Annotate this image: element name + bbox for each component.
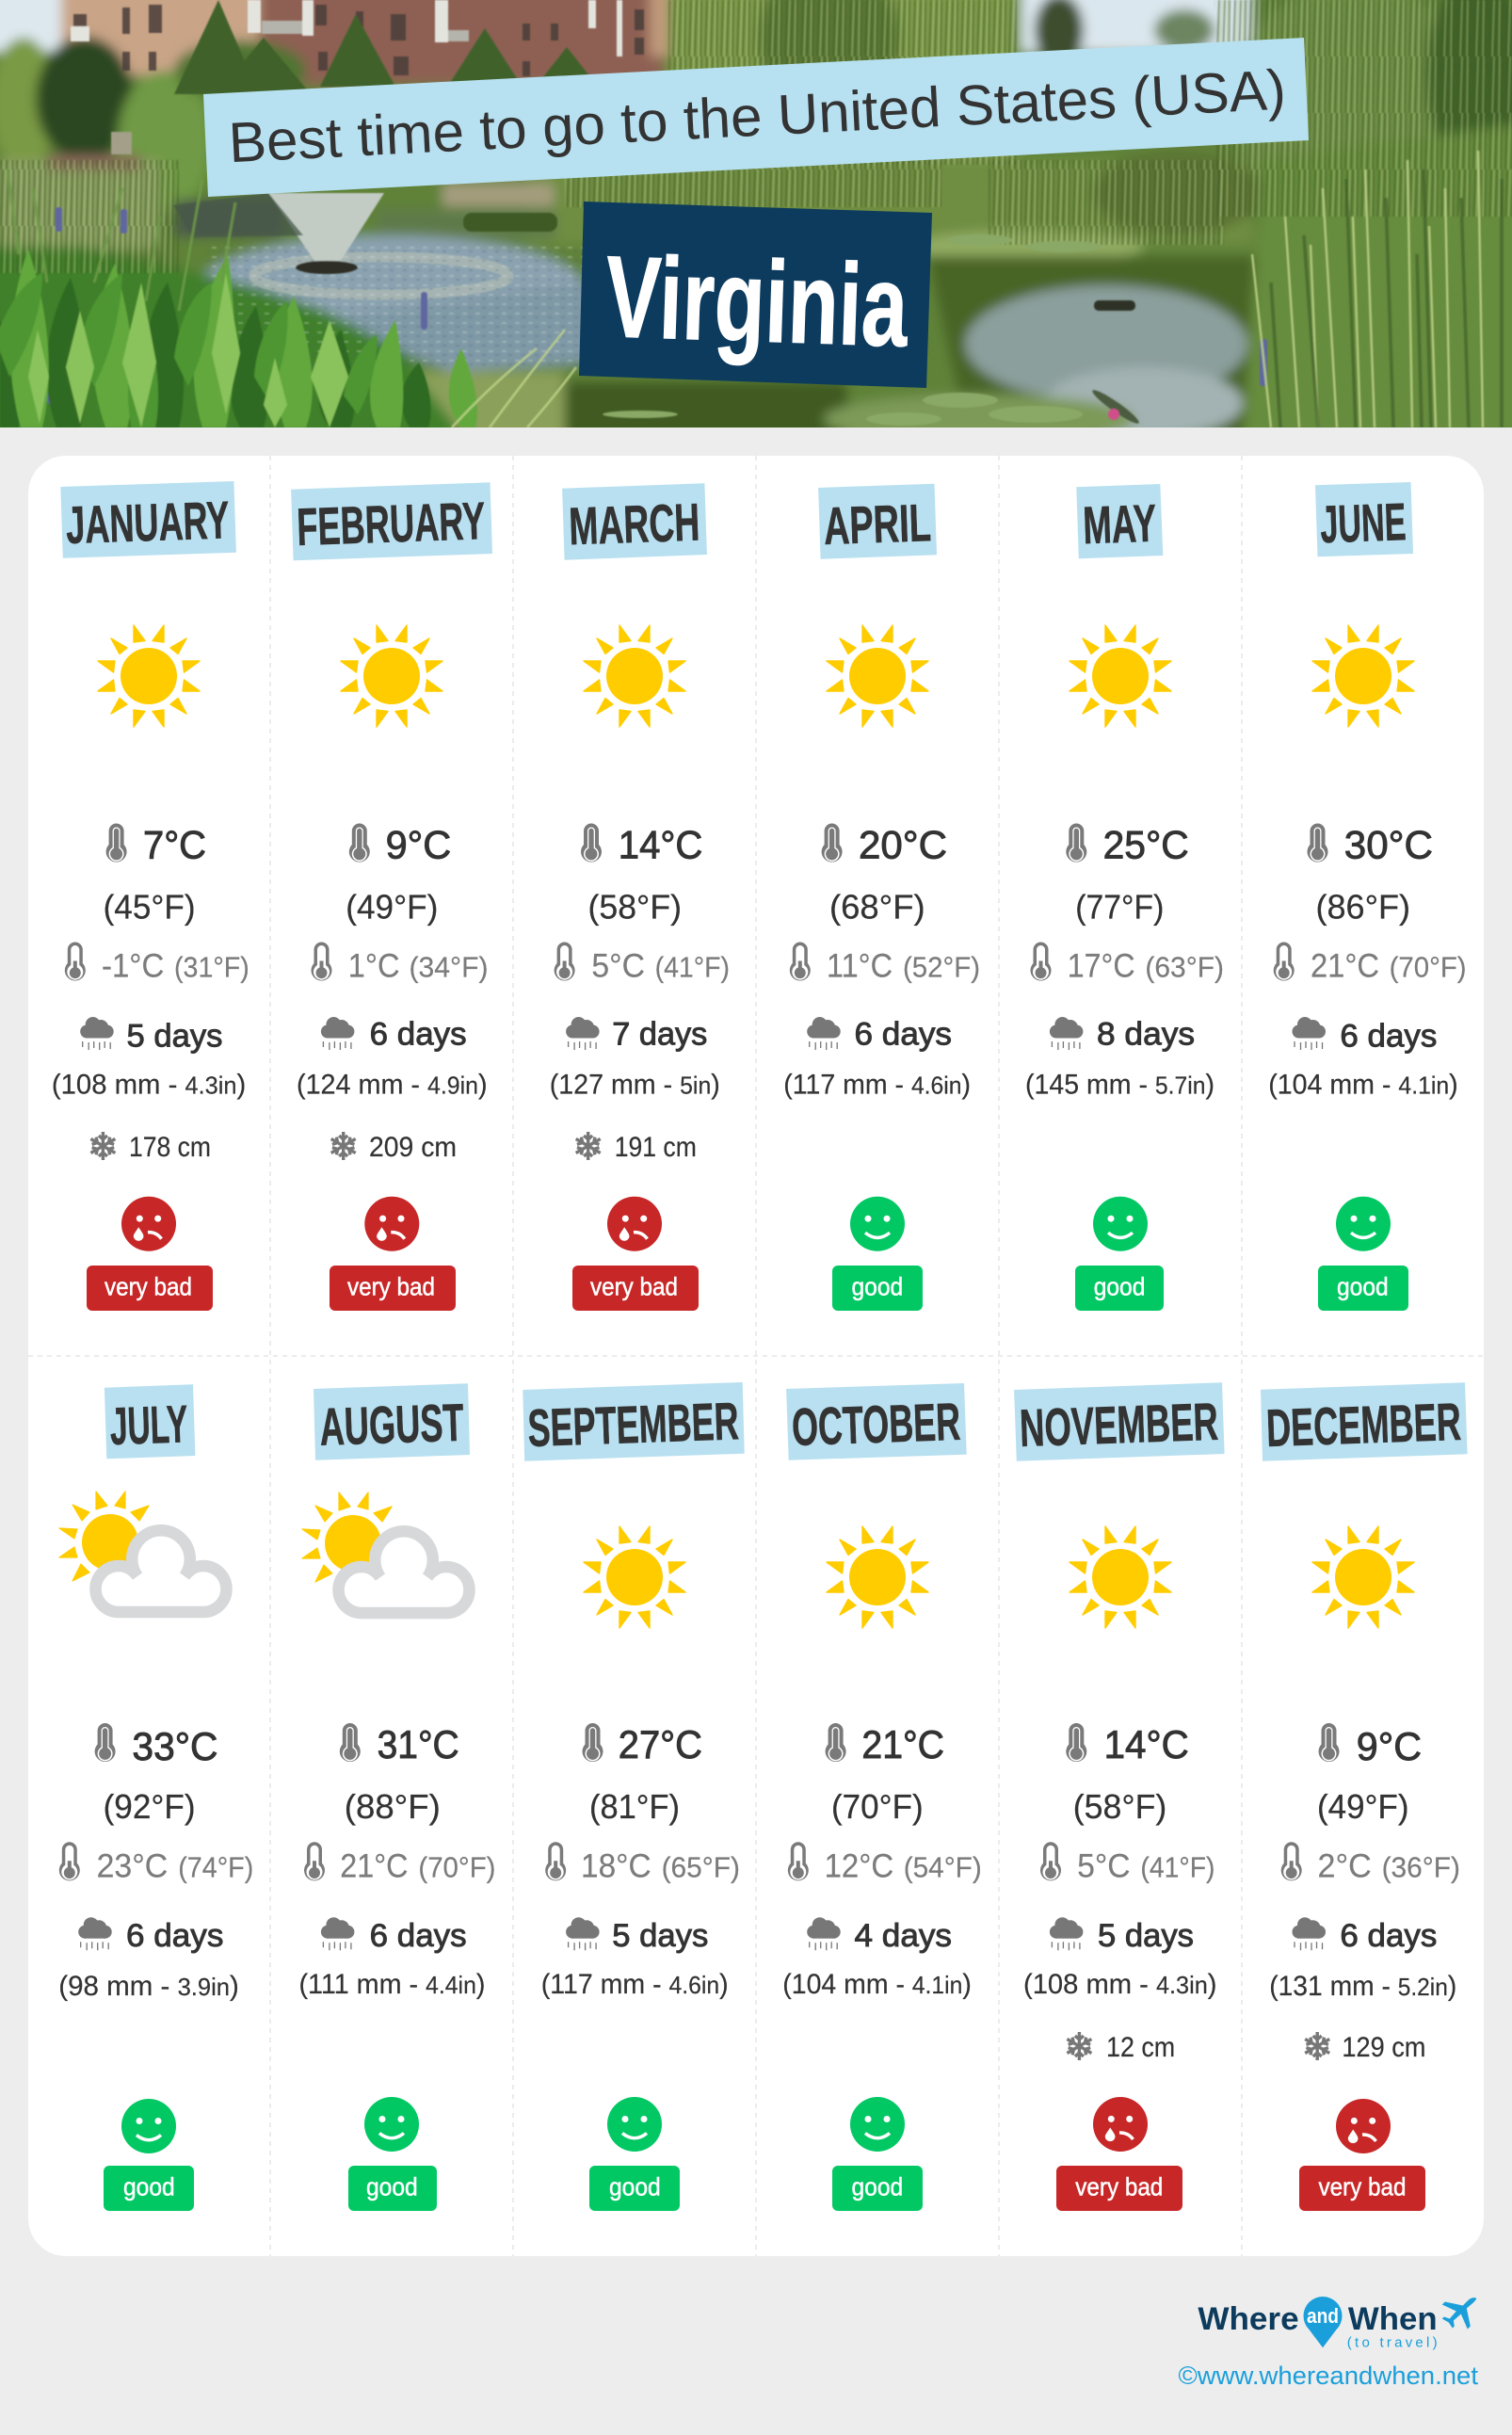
icon: sun behind cloud: [59, 1492, 226, 1612]
rating face: [1336, 2099, 1391, 2153]
high temperature: 31°C: [378, 1722, 459, 1766]
high temperature: [582, 1722, 702, 1766]
low temperature: [59, 1842, 253, 1885]
rainy days: [1292, 1017, 1437, 1054]
month heading: [786, 1383, 967, 1460]
high temperature: 9°C: [1357, 1724, 1422, 1768]
icon: sun: [827, 1526, 928, 1628]
rating badge: [832, 1266, 923, 1311]
low temperature: [1281, 1842, 1460, 1885]
high temperature: [340, 1722, 459, 1766]
rating badge: [1075, 1266, 1164, 1311]
logo: Where and When to travel: [1198, 2297, 1476, 2350]
rating badge: good: [851, 1273, 903, 1301]
low temperature: [788, 1842, 982, 1885]
month heading: JUNE: [1319, 492, 1407, 554]
low temperature: -1°C: [102, 948, 164, 985]
rating badge: [589, 2166, 680, 2211]
low temperature: [555, 942, 730, 985]
panel: January: [52, 481, 249, 1311]
high temperature: 9°C: [386, 823, 451, 867]
rating badge: very bad: [347, 1273, 435, 1301]
high temperature in Fahrenheit: (45°F): [104, 888, 196, 927]
rainfall: (145 mm - 5.7in): [1025, 1070, 1214, 1101]
month heading: [314, 1383, 470, 1460]
rating face: [1093, 2097, 1148, 2152]
low temperature: (63°F): [1145, 951, 1224, 984]
low temperature: (41°F): [1140, 1851, 1214, 1883]
rainfall: (108 mm - 4.3in): [52, 1070, 246, 1101]
snowfall: [329, 1132, 457, 1163]
low temperature: 5°C: [1077, 1847, 1130, 1885]
rainy days: [566, 1017, 707, 1053]
rainy days: [807, 1917, 952, 1954]
high temperature in Fahrenheit: (58°F): [1073, 1787, 1166, 1826]
low temperature: (36°F): [1382, 1851, 1460, 1883]
low temperature: [311, 942, 488, 985]
rating badge: good: [609, 2173, 661, 2201]
rainfall: (117 mm - 4.6in): [541, 1969, 729, 2000]
high temperature: 33°C: [132, 1724, 218, 1768]
low temperature: (70°F): [418, 1851, 495, 1883]
month heading: MAY: [1082, 493, 1157, 555]
rating badge: very bad: [1318, 2173, 1407, 2201]
rating badge: very bad: [590, 1273, 678, 1301]
snowfall: 209 cm: [369, 1132, 457, 1163]
high temperature: 21°C: [861, 1722, 944, 1766]
rainy days: 6 days: [370, 1918, 467, 1954]
rainy days: [80, 1017, 222, 1054]
panel: October: [782, 1383, 982, 2211]
rainfall: (127 mm - 5in): [550, 1070, 720, 1101]
low temperature: (34°F): [409, 951, 488, 984]
rating badge: good: [1094, 1273, 1145, 1301]
month heading: [60, 481, 236, 558]
rating badge: [1299, 2166, 1425, 2211]
high temperature: [1318, 1723, 1422, 1768]
high temperature: [581, 823, 702, 867]
month heading: [105, 1384, 195, 1459]
panel: February: [291, 482, 492, 1311]
high temperature in Fahrenheit: (70°F): [831, 1787, 924, 1826]
rating badge: [348, 2166, 437, 2211]
header photo: pond with fountain: [0, 0, 1512, 447]
high temperature: 25°C: [1103, 823, 1189, 867]
rainfall: (104 mm - 4.1in): [1268, 1070, 1458, 1101]
low temperature: 12°C: [825, 1847, 893, 1885]
rainfall: (108 mm - 4.3in): [1023, 1969, 1216, 2000]
rainy days: 6 days: [855, 1017, 952, 1053]
rainy days: 6 days: [1340, 1918, 1437, 1954]
rating badge: very bad: [1075, 2173, 1163, 2201]
high temperature: 27°C: [619, 1722, 702, 1766]
icon: sun: [584, 625, 685, 727]
high temperature: [95, 1723, 217, 1768]
logo: Where and When to travel: (to travel): [1347, 2335, 1438, 2350]
rainfall: (98 mm - 3.9in): [58, 1971, 239, 2002]
icon: sun: [1312, 625, 1414, 727]
low temperature: [65, 942, 249, 985]
low temperature: [304, 1842, 495, 1885]
rating face: [1093, 1197, 1148, 1251]
high temperature in Fahrenheit: (92°F): [104, 1787, 196, 1826]
low temperature: (65°F): [662, 1851, 740, 1883]
low temperature: [545, 1842, 740, 1885]
logo: Where and When to travel: Where: [1198, 2301, 1299, 2337]
rating face: [850, 1197, 905, 1251]
rating badge: good: [851, 2173, 903, 2201]
high temperature: [826, 1722, 944, 1766]
icon: airplane: [1442, 2298, 1476, 2330]
high temperature in Fahrenheit: (68°F): [829, 888, 925, 927]
calendar card: [28, 456, 1484, 2256]
rating face: [850, 2097, 905, 2152]
rainy days: 7 days: [612, 1017, 707, 1053]
icon: sun: [1070, 625, 1171, 727]
high temperature in Fahrenheit: (58°F): [587, 888, 682, 927]
rainy days: 5 days: [612, 1918, 708, 1954]
rainy days: 4 days: [855, 1918, 952, 1954]
region title: Virginia: [579, 202, 932, 388]
snowfall: 12 cm: [1106, 2032, 1175, 2063]
rating badge: very bad: [105, 1273, 192, 1301]
low temperature: 11°C: [827, 948, 893, 985]
rating badge: [1056, 2166, 1182, 2211]
high temperature in Fahrenheit: (81°F): [589, 1787, 680, 1826]
rainy days: [1050, 1917, 1194, 1954]
high temperature: [1066, 1722, 1189, 1766]
month heading: NOVEMBER: [1019, 1392, 1219, 1458]
low temperature: [1274, 942, 1467, 985]
rainy days: [321, 1917, 467, 1954]
rating face: [364, 1197, 419, 1251]
snowfall: 129 cm: [1342, 2032, 1425, 2063]
low temperature: 18°C: [581, 1847, 651, 1885]
high temperature in Fahrenheit: (88°F): [345, 1787, 441, 1826]
panel: March: [550, 483, 730, 1311]
high temperature: 20°C: [859, 823, 947, 867]
high temperature: 14°C: [1104, 1722, 1189, 1766]
month heading: [818, 484, 937, 559]
month heading: JULY: [109, 1394, 188, 1456]
rainy days: [1292, 1917, 1437, 1954]
month heading: [523, 1382, 745, 1461]
low temperature: 21°C: [340, 1847, 408, 1885]
rainy days: 5 days: [126, 1018, 222, 1054]
icon: sun: [584, 1526, 685, 1628]
low temperature: 5°C: [591, 948, 645, 985]
icon: sun: [341, 625, 442, 727]
low temperature: (41°F): [655, 951, 730, 984]
rating badge: [87, 1266, 213, 1311]
logo: Where and When to travel: When: [1348, 2301, 1438, 2337]
rating badge: [572, 1266, 699, 1311]
high temperature in Fahrenheit: (49°F): [346, 888, 438, 927]
rating badge: good: [123, 2173, 175, 2201]
low temperature: (74°F): [178, 1851, 253, 1883]
high temperature: [349, 823, 451, 867]
low temperature: (54°F): [904, 1851, 982, 1883]
rainy days: [78, 1917, 223, 1954]
high temperature in Fahrenheit: (49°F): [1317, 1787, 1408, 1826]
icon: sun: [98, 625, 200, 727]
low temperature: 21°C: [1311, 948, 1379, 985]
rating face: [607, 1197, 662, 1251]
month heading: AUGUST: [319, 1393, 465, 1457]
rainy days: 6 days: [370, 1017, 467, 1053]
rating badge: [832, 2166, 923, 2211]
icon: sun: [827, 625, 928, 727]
rating badge: [330, 1266, 456, 1311]
rainfall: (104 mm - 4.1in): [782, 1969, 972, 2000]
low temperature: 2°C: [1318, 1847, 1372, 1885]
month heading: [1014, 1382, 1225, 1461]
snowfall: [88, 1132, 211, 1163]
month heading: JANUARY: [65, 490, 230, 555]
title banner: Best time to go to the United States (USA): [227, 58, 1287, 174]
panel: April: [783, 484, 980, 1311]
rainy days: 6 days: [1340, 1018, 1437, 1054]
high temperature: 30°C: [1344, 823, 1433, 867]
panel: December: [1261, 1382, 1468, 2211]
rating face: [364, 2097, 419, 2152]
rainfall: (117 mm - 4.6in): [783, 1070, 971, 1101]
icon: sun: [1070, 1526, 1171, 1628]
snowfall: 178 cm: [129, 1132, 211, 1163]
rating badge: [1318, 1266, 1408, 1311]
high temperature: 14°C: [619, 823, 702, 867]
rainy days: [1050, 1017, 1195, 1053]
high temperature: [106, 823, 206, 867]
low temperature: [1030, 942, 1224, 985]
month heading: FEBRUARY: [296, 491, 486, 556]
low temperature: [790, 942, 980, 985]
month heading: MARCH: [568, 492, 700, 556]
month heading: SEPTEMBER: [526, 1391, 740, 1458]
icon: map pin: [1303, 2297, 1343, 2347]
high temperature in Fahrenheit: (77°F): [1075, 888, 1164, 927]
low temperature: (31°F): [174, 951, 249, 984]
rainy days: 8 days: [1097, 1017, 1195, 1053]
icon: sun: [1312, 1526, 1414, 1628]
rainy days: [321, 1017, 467, 1053]
snowfall: 191 cm: [615, 1132, 697, 1163]
rating face: [121, 2099, 176, 2153]
month heading: [1315, 482, 1413, 556]
snowfall: [573, 1132, 697, 1163]
snowfall: [1065, 2032, 1175, 2063]
rating face: [607, 2097, 662, 2152]
rainy days: [566, 1917, 708, 1954]
high temperature: 7°C: [143, 823, 206, 867]
low temperature: 17°C: [1068, 948, 1135, 985]
rainy days: [807, 1017, 952, 1053]
rainfall: (131 mm - 5.2in): [1269, 1971, 1456, 2002]
low temperature: (52°F): [903, 951, 980, 984]
region title: Virginia: Virginia: [603, 233, 911, 372]
logo: Where and When to travel: and: [1307, 2304, 1339, 2328]
rainfall: (111 mm - 4.4in): [299, 1969, 486, 2000]
rainfall: (124 mm - 4.9in): [297, 1070, 488, 1101]
month heading: APRIL: [823, 492, 932, 556]
rating badge: good: [366, 2173, 418, 2201]
month heading: [1076, 484, 1163, 558]
icon: sun behind cloud: [302, 1492, 469, 1613]
month heading: OCTOBER: [791, 1392, 961, 1457]
high temperature in Fahrenheit: (86°F): [1316, 888, 1410, 927]
low temperature: 23°C: [97, 1847, 168, 1885]
website credit: ©www.whereandwhen.net: [1179, 2362, 1478, 2390]
month heading: [291, 482, 492, 560]
low temperature: (70°F): [1390, 951, 1467, 984]
panel: May: [1025, 484, 1224, 1311]
panel: July: [58, 1384, 253, 2211]
high temperature: [1066, 823, 1189, 867]
rainy days: 5 days: [1098, 1918, 1194, 1954]
snowfall: [1303, 2032, 1425, 2063]
rating badge: good: [1337, 1273, 1389, 1301]
panel: September: [523, 1382, 745, 2211]
panel: June: [1268, 482, 1467, 1311]
rainy days: 6 days: [126, 1918, 223, 1954]
rating badge: [104, 2166, 194, 2211]
rating face: [1336, 1197, 1391, 1251]
rating face: [121, 1197, 176, 1251]
low temperature: 1°C: [348, 948, 399, 985]
panel: November: [1014, 1382, 1225, 2211]
month heading: [562, 483, 707, 560]
low temperature: [1040, 1842, 1214, 1885]
panel: August: [299, 1383, 495, 2211]
